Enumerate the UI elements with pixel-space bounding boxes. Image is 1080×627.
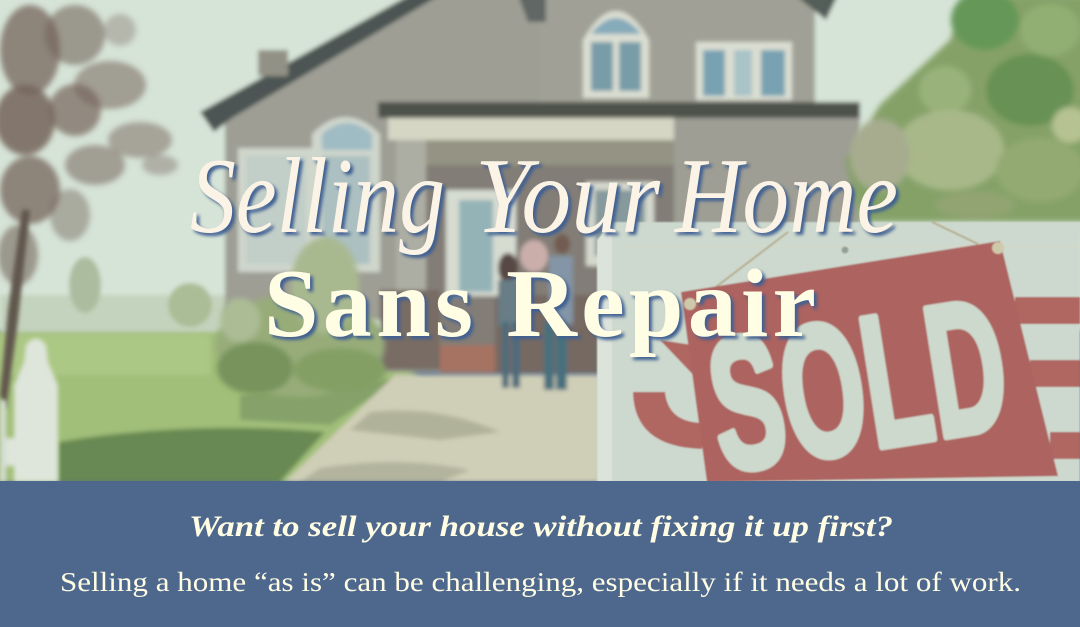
family on the path (498, 234, 573, 390)
left windows (238, 117, 380, 272)
title line 1: Selling (190, 137, 445, 256)
large letter S on board (633, 335, 702, 449)
upper right window (696, 42, 792, 100)
question headline: Want to sell your house without fixing it up first? (189, 510, 893, 543)
bare tree on the left (0, 5, 178, 285)
porch wall (424, 165, 674, 370)
sold sign (597, 222, 1080, 511)
title line 1: Your (475, 137, 661, 256)
leafy tree on the right (845, 0, 1080, 222)
background photo: house and yard (0, 0, 1080, 482)
bottom band (0, 481, 1080, 627)
title line 1 (190, 137, 898, 256)
chimney (258, 50, 288, 76)
sign board (597, 222, 1080, 482)
lawn (0, 332, 420, 482)
soft wash over photo (0, 0, 1080, 481)
upper arched window (583, 11, 649, 98)
red sold placard (681, 241, 1058, 482)
sky (0, 0, 1080, 330)
right porch window (586, 182, 654, 266)
driveway (285, 375, 600, 482)
house wall (225, 0, 860, 372)
tree trunk (0, 210, 30, 410)
front door (446, 190, 516, 296)
hanging rope (712, 222, 978, 290)
placard pins (684, 298, 696, 310)
brick lower wall (380, 290, 440, 370)
distant haze and small trees (0, 295, 240, 335)
title line 2: Sans Repair (264, 250, 816, 358)
shrub by the house (215, 237, 386, 397)
porch column (396, 140, 426, 300)
description line: Selling a home “as is” can be challenging, especially if it needs a lot of work. (60, 567, 1021, 597)
large letter E on board (1015, 297, 1080, 459)
roof (200, 0, 445, 132)
title line 1: Home (673, 137, 898, 256)
white picket fence (0, 338, 58, 482)
title (190, 137, 898, 358)
porch roof (378, 102, 860, 118)
